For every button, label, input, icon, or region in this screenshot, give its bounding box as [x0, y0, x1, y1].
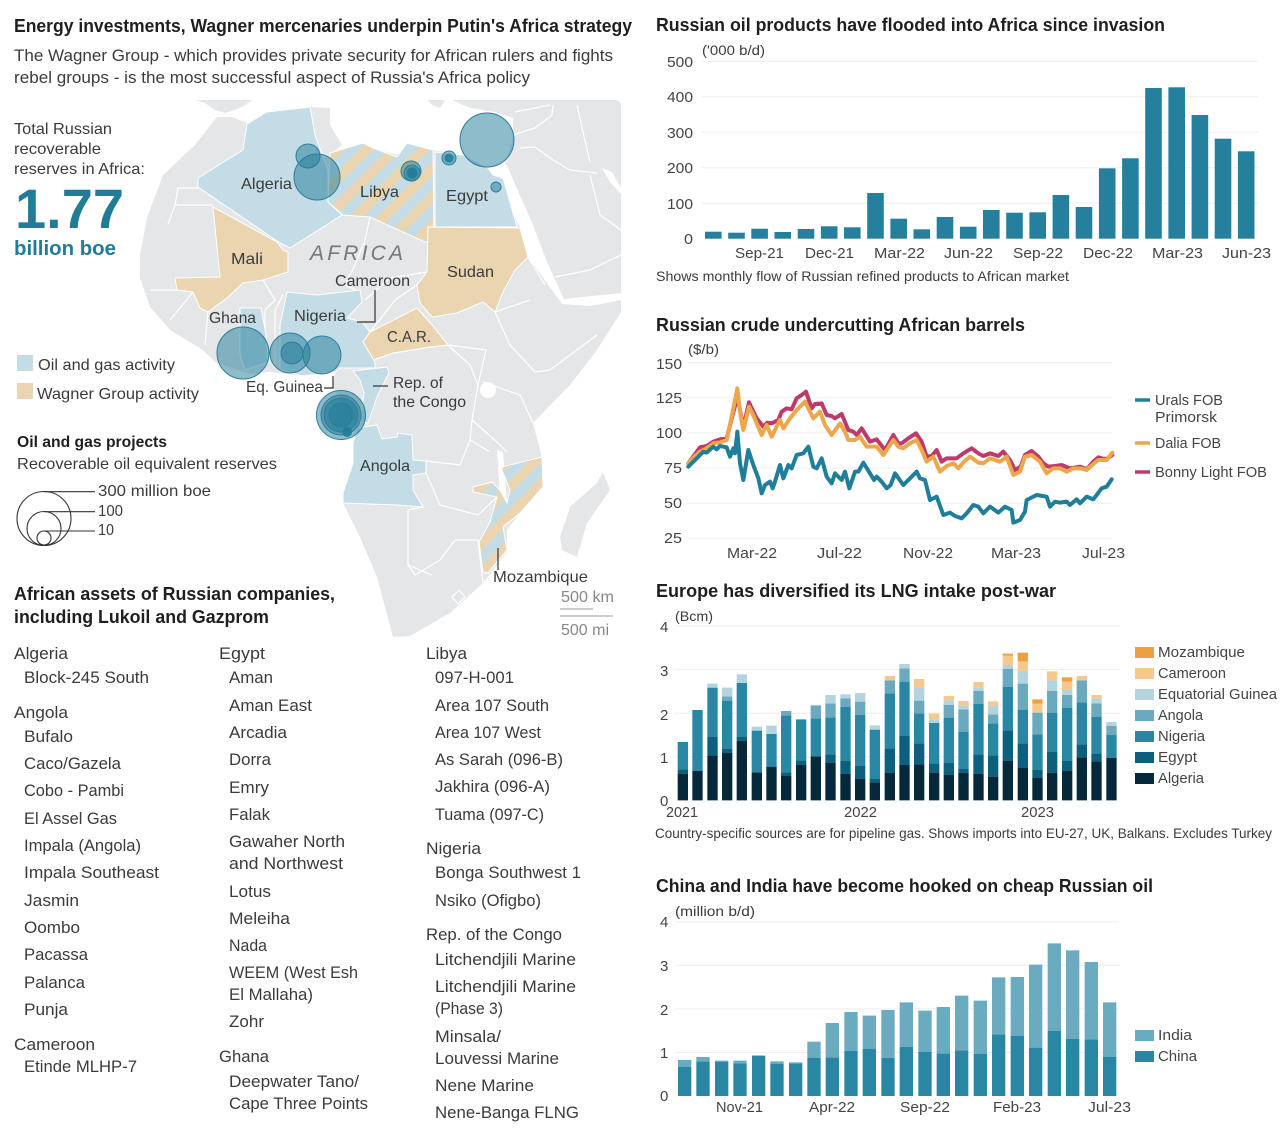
map legend: circle size: 100	[98, 503, 123, 520]
country: Mozambique	[473, 457, 543, 573]
panel: Russian oil products chart	[656, 15, 1271, 284]
country: C.A.R.	[363, 308, 448, 360]
asset list: column 1: Cameroon	[14, 1035, 95, 1054]
x axis labels: Feb-23	[993, 1099, 1041, 1116]
x axis labels: Sep-22	[900, 1099, 950, 1116]
map labels: the Congo	[393, 394, 466, 411]
asset list: column 2: Emry	[229, 778, 269, 797]
map labels: Angola	[360, 458, 410, 475]
x axis labels: Mar-22	[874, 245, 925, 262]
asset list: column 1: Palanca	[24, 973, 86, 992]
map labels: Nigeria	[294, 308, 346, 325]
y axis and gridlines	[660, 619, 1120, 810]
asset list: column 2: Falak	[229, 805, 270, 824]
y axis and gridlines: 2	[660, 1002, 668, 1019]
chart note: Shows monthly flow of Russian refined products to African market	[656, 268, 1069, 284]
x axis labels	[735, 245, 1271, 262]
x axis labels: Mar-22	[727, 545, 777, 562]
y axis and gridlines: 25	[664, 530, 682, 547]
asset list: column 3: Minsala/	[435, 1027, 501, 1046]
asset list: column 1: Bufalo	[24, 727, 73, 746]
country: Algeria	[198, 107, 342, 248]
asset list: column 1: Caco/Gazela	[24, 754, 122, 773]
x axis labels: 2022	[844, 804, 877, 821]
map scale	[560, 589, 614, 639]
asset list: column 2: Aman	[229, 668, 273, 687]
map legend: activity: Wagner Group activity	[37, 386, 199, 403]
x axis labels	[666, 804, 1054, 821]
map labels: Egypt	[446, 188, 489, 205]
asset list: column 1: Punja	[24, 1000, 69, 1019]
bars: monthly flow	[705, 87, 1254, 239]
x axis labels: 2023	[1021, 804, 1054, 821]
legend: sources: Equatorial Guinea	[1158, 686, 1278, 703]
country: Egypt	[435, 152, 517, 227]
asset list: column 3: Litchendjili Marine	[435, 950, 576, 969]
water: gulf and lakes	[480, 168, 621, 503]
asset list: column 3	[426, 644, 581, 1122]
asset list: column 2: El Mallaha)	[229, 985, 313, 1004]
lines: Urals, Dalia, Bonny Light	[688, 388, 1112, 523]
y axis and gridlines: 0	[660, 1088, 668, 1105]
y axis and gridlines: 100	[656, 425, 682, 442]
y axis and gridlines	[660, 914, 1119, 1105]
oil and gas project circles	[217, 113, 514, 440]
asset list: column 3: Nsiko (Ofigbo)	[435, 891, 541, 910]
asset list: column 3: Bonga Southwest 1	[435, 863, 581, 882]
y axis and gridlines	[667, 54, 1258, 248]
map legend: circle size: 300 million boe	[98, 483, 211, 500]
y axis and gridlines: 200	[667, 160, 693, 177]
asset list: column 2: Zohr	[229, 1012, 264, 1031]
asset list: column 2: Aman East	[229, 696, 312, 715]
asset list: column 2: Deepwater Tano/	[229, 1072, 359, 1091]
map labels: Cameroon	[335, 273, 410, 290]
asset list: column 1: Cobo - Pambi	[24, 781, 124, 800]
y axis and gridlines: 125	[656, 390, 682, 407]
callout: total recoverable reserves: billion boe	[14, 238, 116, 260]
map labels: Algeria	[241, 176, 292, 193]
asset list: column 2: Gawaher North	[229, 832, 345, 851]
asset list: column 2: Lotus	[229, 882, 271, 901]
asset list: column 1: Oombo	[24, 918, 80, 937]
asset list: column 3: Jakhira (096-A)	[435, 777, 550, 796]
y axis and gridlines: 150	[656, 356, 682, 373]
legend: sources: Egypt	[1158, 749, 1198, 766]
country: Libya	[328, 143, 434, 242]
asset list: column 2: Arcadia	[229, 723, 288, 742]
callout: total recoverable reserves: 1.77	[15, 177, 124, 240]
x axis labels: Nov-21	[716, 1099, 763, 1116]
subtitle: The Wagner Group - which provides private security for African rulers and fights	[14, 46, 613, 65]
unit label: ($/b)	[688, 341, 719, 357]
legend: crude grades: Urals FOB	[1155, 392, 1223, 409]
asset list: column 2: WEEM (West Esh	[229, 963, 358, 982]
asset list: column 3: Litchendjili Marine	[435, 977, 576, 996]
asset list: column 3: Rep. of the Congo	[426, 925, 562, 944]
x axis labels: Jul-23	[1082, 545, 1125, 562]
y axis and gridlines: 3	[660, 958, 668, 975]
map legend: circle size	[17, 434, 277, 546]
y axis and gridlines	[656, 356, 1112, 547]
legend: crude grades	[1135, 392, 1267, 481]
asset list: column 2: Cape Three Points	[229, 1094, 368, 1113]
map legend: circle size: Recoverable oil equivalent reserves	[17, 456, 277, 473]
x axis labels: Jul-22	[817, 545, 862, 562]
legend: sources: Angola	[1158, 707, 1204, 724]
panel: Africa map	[140, 100, 621, 639]
x axis labels: Apr-22	[809, 1099, 855, 1116]
map scale: 500 km	[561, 589, 614, 606]
heading: oil products: Russian oil products have flooded into Africa since invasion	[656, 15, 1165, 35]
callout: total recoverable reserves: recoverable	[14, 141, 101, 158]
country: Republic of the Congo	[353, 367, 389, 423]
y axis and gridlines: 4	[660, 914, 668, 931]
y axis and gridlines: 400	[667, 89, 693, 106]
asset list: column 3: Libya	[426, 644, 468, 663]
asset list: column 2: Nada	[229, 936, 268, 955]
x axis labels: Mar-23	[1152, 245, 1203, 262]
x axis labels: 2021	[666, 804, 698, 821]
x axis labels: Jul-23	[1088, 1099, 1131, 1116]
map labels	[209, 176, 588, 586]
map labels: C.A.R.	[387, 329, 431, 346]
land: surrounding regions and Africa	[140, 100, 621, 637]
internal country borders	[150, 105, 621, 604]
x axis labels	[727, 545, 1125, 562]
panel: China and India chart	[656, 876, 1198, 1116]
x axis labels: Mar-23	[991, 545, 1041, 562]
country: Ghana	[240, 308, 268, 370]
subtitle: rebel groups - is the most successful aspect of Russia's Africa policy	[14, 68, 530, 87]
map labels: Sudan	[447, 264, 494, 281]
legend: India and China	[1135, 1027, 1198, 1065]
unit label: ('000 b/d)	[702, 42, 765, 58]
legend: India and China: India	[1158, 1027, 1193, 1044]
country: Sudan	[417, 227, 528, 317]
asset list: column 3: Louvessi Marine	[435, 1049, 559, 1068]
legend: crude grades: Bonny Light FOB	[1155, 464, 1267, 481]
asset list: column 1: Block-245 South	[24, 668, 149, 687]
asset list: column 3: As Sarah (096-B)	[435, 750, 563, 769]
x axis labels: Sep-21	[735, 245, 784, 262]
country: Angola	[343, 425, 426, 507]
asset list: column 1: Jasmin	[24, 891, 79, 910]
y axis and gridlines: 300	[667, 125, 693, 142]
asset list: column 3: 097-H-001	[435, 668, 514, 687]
map labels: Ghana	[209, 310, 256, 327]
map labels: Rep. of	[393, 375, 444, 392]
legend: sources: Nigeria	[1158, 728, 1206, 745]
map legend: circle size: 10	[98, 522, 114, 539]
x axis labels: Nov-22	[903, 545, 953, 562]
asset list: column 2: Ghana	[219, 1047, 270, 1066]
panel: Europe LNG chart	[655, 581, 1278, 841]
asset list: column 1: Pacassa	[24, 945, 89, 964]
asset list: column 3: Area 107 South	[435, 696, 549, 715]
x axis labels: Jun-22	[944, 245, 993, 262]
asset list: column 2	[219, 644, 368, 1113]
x axis labels: Sep-22	[1013, 245, 1063, 262]
y axis and gridlines: 50	[664, 495, 682, 512]
legend: sources: Algeria	[1158, 770, 1205, 787]
unit label: (million b/d)	[675, 903, 755, 919]
asset list: column 1: Angola	[14, 703, 69, 722]
legend: sources: Mozambique	[1158, 644, 1245, 661]
asset list: column 2: and Northwest	[229, 854, 343, 873]
asset list: column 2: Egypt	[219, 644, 265, 663]
heading: China and India: China and India have become hooked on cheap Russian oil	[656, 876, 1153, 896]
callout: total recoverable reserves: reserves in Africa:	[14, 161, 145, 178]
panel: crude price chart	[656, 315, 1267, 562]
y axis and gridlines: 4	[660, 619, 668, 636]
x axis labels	[716, 1099, 1131, 1116]
asset list: column 1: Impala Southeast	[24, 863, 159, 882]
stacked bars: LNG by source	[678, 653, 1117, 800]
heading: LNG: Europe has diversified its LNG intake post-war	[656, 581, 1056, 601]
y axis and gridlines: 0	[660, 793, 668, 810]
heading: African assets: including Lukoil and Gazprom	[14, 607, 269, 627]
y axis and gridlines: 100	[667, 196, 693, 213]
asset list: column 3: Nigeria	[426, 839, 482, 858]
asset list: column 1	[14, 644, 159, 1076]
asset list: column 3: Area 107 West	[435, 723, 541, 742]
y axis and gridlines: 1	[660, 1045, 668, 1062]
main title: Energy investments, Wagner mercenaries underpin Putin's Africa strategy	[14, 16, 632, 36]
map labels: AFRICA	[308, 242, 403, 265]
subtitle	[14, 46, 613, 87]
y axis and gridlines: 3	[660, 663, 668, 680]
map labels: Mali	[231, 251, 263, 268]
legend: crude grades: Dalia FOB	[1155, 435, 1221, 452]
map legend: activity: Oil and gas activity	[38, 357, 175, 374]
x axis labels: Dec-22	[1083, 245, 1133, 262]
legend: sources	[1135, 644, 1278, 787]
y axis and gridlines: 2	[660, 707, 668, 724]
heading: African assets: African assets of Russian companies,	[14, 584, 335, 604]
stacked bars: China and India imports	[678, 943, 1116, 1096]
asset list: column 2: Dorra	[229, 750, 272, 769]
asset list: column 3: Tuama (097-C)	[435, 805, 544, 824]
unit label: (Bcm)	[675, 608, 713, 624]
callout: total recoverable reserves: Total Russian	[14, 121, 112, 138]
asset list: column 3: (Phase 3)	[435, 999, 503, 1018]
asset list: column 1: Etinde MLHP-7	[24, 1057, 137, 1076]
map legend: activity	[17, 355, 199, 403]
legend: sources: Cameroon	[1158, 665, 1226, 682]
asset list: column 1: Algeria	[14, 644, 69, 663]
countries: Nigeria and Cameroon	[280, 290, 375, 376]
map leader lines	[324, 290, 498, 570]
map scale: 500 mi	[561, 622, 609, 639]
x axis labels: Jun-23	[1222, 245, 1271, 262]
y axis and gridlines: 0	[684, 231, 693, 248]
asset list: column 1: Impala (Angola)	[24, 836, 141, 855]
country: Mali	[175, 207, 288, 312]
map legend: circle size: Oil and gas projects	[17, 434, 167, 451]
x axis labels: Dec-21	[805, 245, 854, 262]
heading: crude: Russian crude undercutting African barrels	[656, 315, 1025, 335]
map labels: Eq. Guinea	[246, 379, 323, 396]
map labels: Libya	[360, 184, 399, 201]
map labels: Mozambique	[493, 569, 588, 586]
legend: crude grades: Primorsk	[1155, 409, 1218, 426]
callout: total recoverable reserves	[14, 121, 145, 260]
asset list: column 2: Meleiha	[229, 909, 291, 928]
heading: African assets	[14, 584, 335, 627]
y axis and gridlines: 1	[660, 750, 668, 767]
legend: India and China: China	[1158, 1048, 1198, 1065]
chart note: Country-specific sources are for pipeline gas. Shows imports into EU-27, UK, Balkans. Excludes Turkey	[655, 825, 1272, 841]
y axis and gridlines: 75	[664, 460, 682, 477]
asset list: column 3: Nene Marine	[435, 1076, 534, 1095]
asset list: column 3: Nene-Banga FLNG	[435, 1103, 579, 1122]
asset list: column 1: El Assel Gas	[24, 809, 117, 828]
y axis and gridlines: 500	[667, 54, 693, 71]
